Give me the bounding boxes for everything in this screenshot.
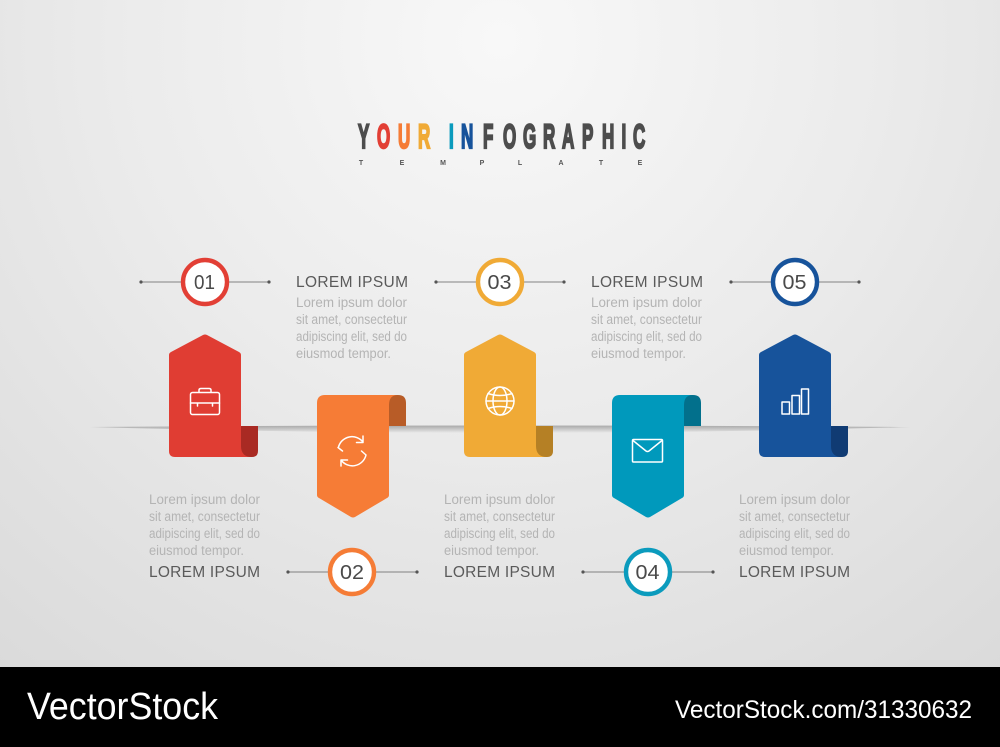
text 03: adipiscing elit, sed do — [444, 526, 555, 541]
text 05: sit amet, consectetur — [739, 509, 850, 524]
subtitle: A — [558, 160, 564, 167]
title: N — [461, 118, 473, 156]
text 02: adipiscing elit, sed do — [296, 329, 407, 344]
title: F — [483, 118, 493, 156]
connector 03 — [434, 280, 566, 284]
text 02: Lorem ipsum dolor — [296, 295, 408, 310]
subtitle: E — [638, 160, 643, 167]
connector 04 — [581, 570, 715, 574]
badge 01 — [183, 260, 227, 304]
badge 04: 04 — [636, 562, 660, 584]
subtitle: T — [359, 160, 364, 167]
icon: mail — [632, 440, 662, 462]
text 01: Lorem ipsum dolor — [149, 492, 261, 507]
subtitle: M — [440, 160, 446, 167]
connector 01 — [139, 280, 271, 284]
title: G — [523, 118, 536, 156]
horizontal shadow line — [90, 426, 910, 433]
title: U — [398, 118, 410, 156]
footer brand: VectorStock — [27, 686, 219, 728]
text 05: eiusmod tempor. — [739, 543, 834, 558]
text 04: sit amet, consectetur — [591, 312, 702, 327]
footer bar — [0, 667, 1000, 747]
text 03: LOREM IPSUM — [444, 564, 555, 581]
subtitle: P — [480, 160, 485, 167]
text 03: sit amet, consectetur — [444, 509, 555, 524]
text 04: Lorem ipsum dolor — [591, 295, 703, 310]
ribbon 02 — [317, 395, 406, 518]
text 05 — [739, 492, 851, 581]
text 01: sit amet, consectetur — [149, 509, 260, 524]
text 02: eiusmod tempor. — [296, 346, 391, 361]
footer url: VectorStock.com/31330632 — [675, 696, 972, 724]
icon: globe — [486, 387, 514, 415]
text 01 — [149, 492, 261, 581]
badge 02: 02 — [340, 562, 364, 584]
text 05: LOREM IPSUM — [739, 564, 850, 581]
badge 04 — [626, 550, 670, 594]
subtitle: L — [518, 160, 523, 167]
badge 03 — [478, 260, 522, 304]
icon: bar chart — [782, 389, 808, 414]
title: I — [449, 118, 454, 156]
badge 02 — [330, 550, 374, 594]
subtitle: T — [599, 160, 604, 167]
badge 05 — [773, 260, 817, 304]
text 02: LOREM IPSUM — [296, 274, 408, 291]
title: R — [418, 118, 430, 156]
ribbon 04 — [612, 395, 701, 518]
text 04: eiusmod tempor. — [591, 346, 686, 361]
title: O — [377, 118, 390, 156]
ribbon 05 — [759, 334, 848, 457]
step 03 — [434, 260, 566, 581]
text 05: adipiscing elit, sed do — [739, 526, 850, 541]
text 03: eiusmod tempor. — [444, 543, 539, 558]
badge 03: 03 — [488, 272, 512, 294]
title: A — [562, 118, 574, 156]
step 04 — [581, 274, 715, 594]
text 04: adipiscing elit, sed do — [591, 329, 702, 344]
ribbon 03 — [464, 334, 553, 457]
step 02 — [286, 274, 419, 594]
text 01: adipiscing elit, sed do — [149, 526, 260, 541]
badge 05: 05 — [782, 272, 806, 294]
subtitle: E — [400, 160, 405, 167]
title — [358, 118, 645, 156]
title: C — [633, 118, 645, 156]
badge 01: 01 — [194, 272, 215, 294]
step 05 — [729, 260, 861, 581]
text 01: LOREM IPSUM — [149, 564, 260, 581]
step 01 — [139, 260, 271, 581]
text 02 — [296, 274, 408, 361]
connector 05 — [729, 280, 861, 284]
text 02: sit amet, consectetur — [296, 312, 407, 327]
title: I — [622, 118, 626, 156]
text 04: LOREM IPSUM — [591, 274, 703, 291]
text 03 — [444, 492, 556, 581]
title: R — [543, 118, 555, 156]
title: Y — [358, 118, 369, 156]
connector 02 — [286, 570, 419, 574]
title: P — [582, 118, 593, 156]
ribbon 01 — [169, 334, 258, 457]
text 01: eiusmod tempor. — [149, 543, 244, 558]
text 03: Lorem ipsum dolor — [444, 492, 556, 507]
text 04 — [591, 274, 703, 361]
icon: sync — [338, 436, 366, 466]
icon: briefcase — [190, 388, 220, 414]
title: H — [602, 118, 614, 156]
title: O — [503, 118, 516, 156]
text 05: Lorem ipsum dolor — [739, 492, 851, 507]
